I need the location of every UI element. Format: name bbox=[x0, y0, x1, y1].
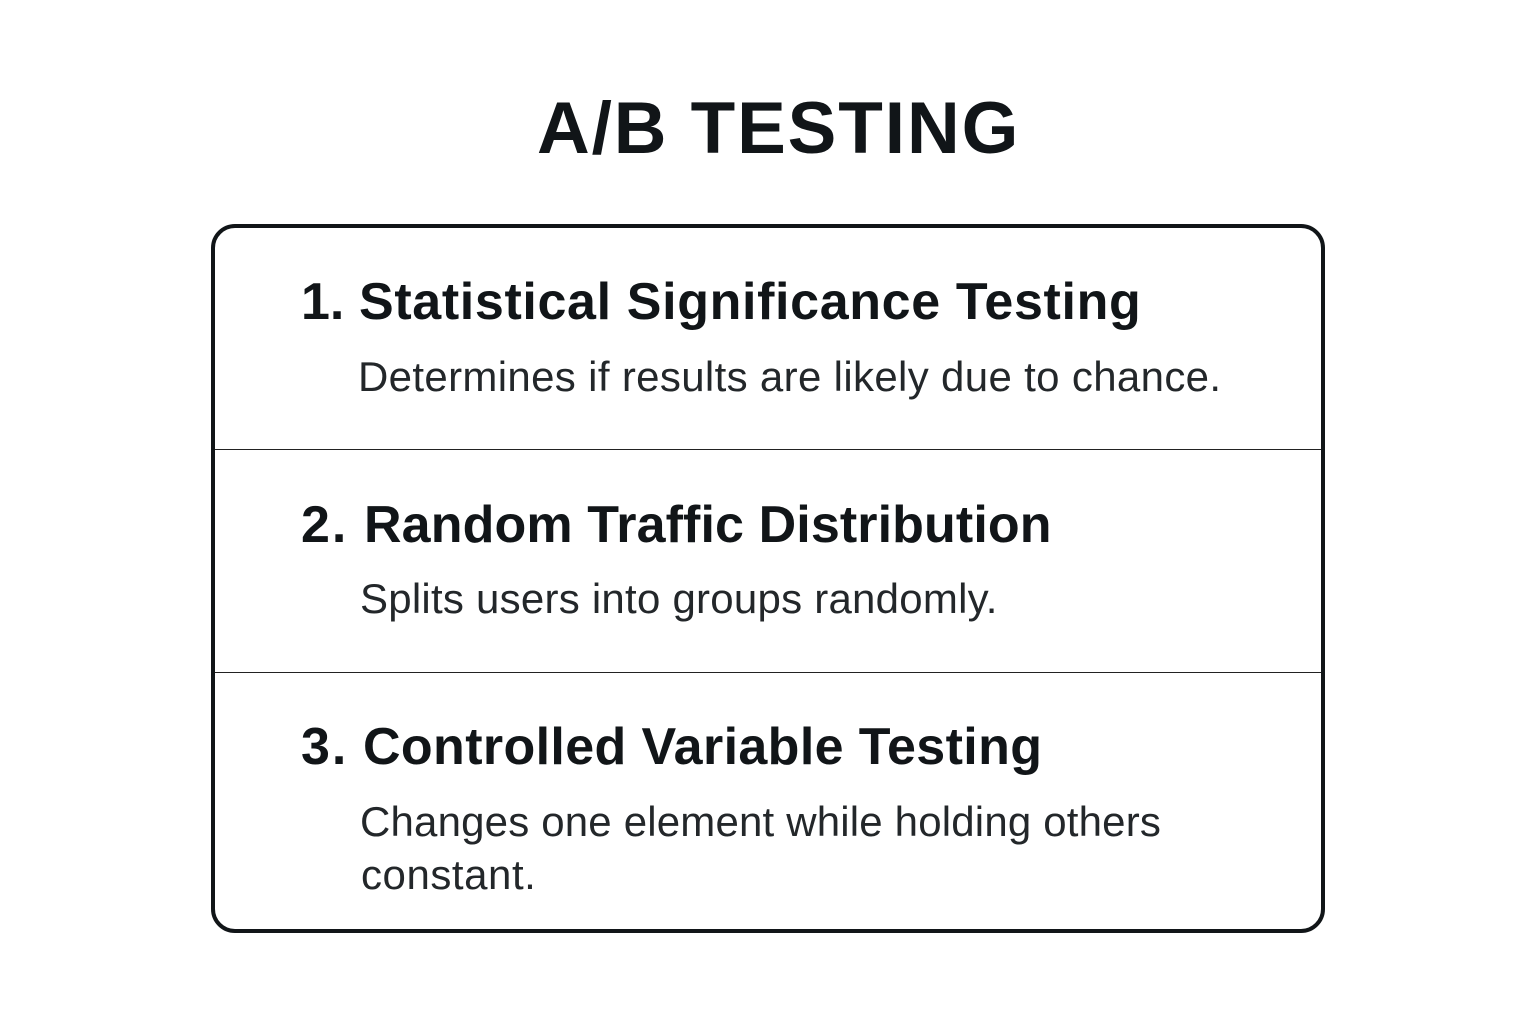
item 3 heading: Controlled Variable Testing bbox=[363, 718, 1042, 776]
item 3 heading: 3. bbox=[301, 718, 348, 776]
item 3 description: Changes one element while holding others bbox=[360, 798, 1161, 845]
panel: testing methods bbox=[211, 224, 1325, 933]
item 3 description bbox=[360, 798, 1161, 898]
item 1 description: Determines if results are likely due to chance. bbox=[358, 353, 1221, 400]
item 2 heading: 2. bbox=[301, 496, 348, 554]
item 3 description: constant. bbox=[361, 851, 536, 898]
item 1 heading: 1. bbox=[301, 273, 344, 331]
title: A/B TESTING bbox=[537, 88, 1020, 169]
item 2 description: Splits users into groups randomly. bbox=[360, 575, 998, 622]
item 2 heading: Random Traffic Distribution bbox=[364, 496, 1052, 554]
item 1 heading: Statistical Significance Testing bbox=[359, 273, 1141, 331]
